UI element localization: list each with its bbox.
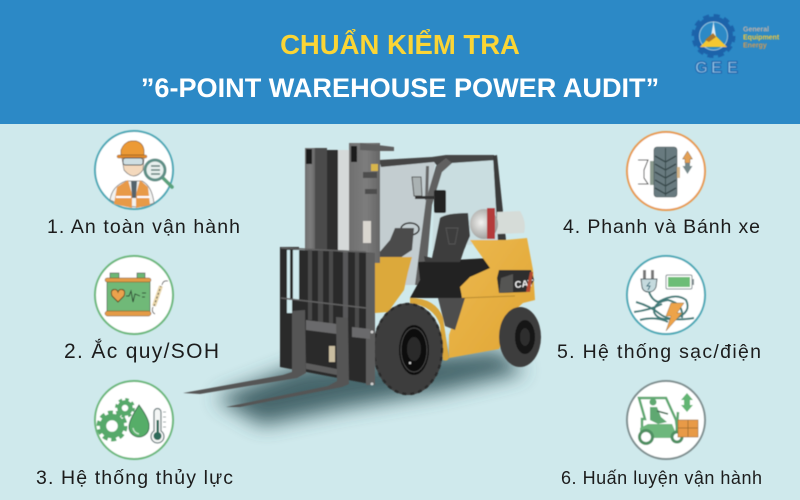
header banner <box>0 0 800 124</box>
rear body: CAT <box>514 278 534 291</box>
gas tank <box>470 208 525 239</box>
mast <box>305 143 394 263</box>
title: ”6-POINT WAREHOUSE POWER AUDIT” <box>141 72 659 103</box>
icon: brakes and tires <box>627 132 705 210</box>
overhead guard and cab glass <box>379 155 506 285</box>
label 6: 6. Huấn luyện vận hành <box>561 468 762 488</box>
wheel bolts <box>370 330 411 386</box>
front fender <box>410 298 449 361</box>
title: CHUẨN KIỂM TRA <box>280 29 520 60</box>
forklift illustration <box>183 143 541 407</box>
forklift ground shadow <box>215 350 525 425</box>
icon: operator training <box>627 381 705 459</box>
icon: charging and electrical system <box>627 256 705 334</box>
label 5: 5. Hệ thống sạc/điện <box>557 341 761 363</box>
seat stitching <box>446 228 458 244</box>
icon: safety inspector <box>95 131 173 209</box>
rear body <box>449 238 535 358</box>
label 1: 1. An toàn vận hành <box>47 216 240 238</box>
rear wheel <box>499 307 541 367</box>
front cowl <box>375 257 412 313</box>
label 4: 4. Phanh và Bánh xe <box>563 216 760 238</box>
icon: battery SOH <box>95 256 173 334</box>
logo: GEE: E <box>727 59 738 77</box>
seat <box>424 213 470 262</box>
cab floor <box>410 258 490 298</box>
mirror <box>412 177 446 213</box>
forks <box>183 310 349 407</box>
cab step <box>438 298 465 330</box>
load backrest and lift carriage <box>280 247 375 385</box>
title <box>141 29 659 103</box>
logo: GEE: Equipment <box>743 34 780 42</box>
label 3: 3. Hệ thống thủy lực <box>36 467 233 489</box>
icon: hydraulic system <box>95 381 173 459</box>
label 2: 2. Ắc quy/SOH <box>64 339 219 363</box>
front wheel <box>373 303 443 395</box>
logo: GEE: Energy <box>743 42 767 50</box>
logo: GEE: General <box>743 26 769 34</box>
logo: GEE: G <box>695 59 708 77</box>
steering and dashboard <box>378 223 419 258</box>
logo: GEE <box>694 16 780 77</box>
logo: GEE: E <box>711 59 722 77</box>
